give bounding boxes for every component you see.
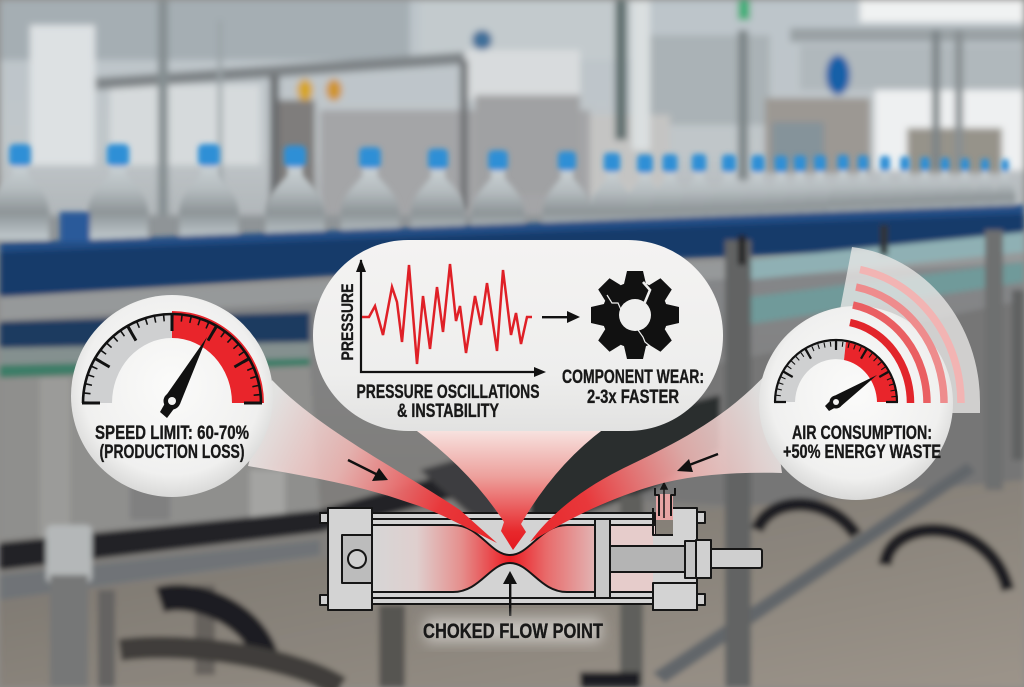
port arrow <box>661 483 667 518</box>
barrel body <box>372 513 655 604</box>
lower body <box>0 245 1024 687</box>
conveyor band <box>0 205 1024 297</box>
label: production loss: (PRODUCTION LOSS) <box>100 442 244 463</box>
gauge ticks <box>82 313 262 403</box>
needle <box>160 337 207 418</box>
pneumatic cylinder diagram <box>320 488 762 610</box>
label: energy waste: +50% ENERGY WASTE <box>783 442 941 463</box>
gauge bands <box>82 313 172 403</box>
gauge ticks <box>774 340 898 402</box>
panel: air consumption gauge <box>759 247 980 500</box>
glow: left connector <box>248 380 497 543</box>
right end cap <box>653 508 697 583</box>
pressure chart <box>356 259 546 377</box>
label: air consumption: AIR CONSUMPTION: <box>792 423 932 444</box>
label halo <box>425 618 601 642</box>
panel: speed limit gauge <box>71 295 273 497</box>
right chamber <box>610 525 655 592</box>
bottles row <box>0 144 1015 240</box>
label: component wear: COMPONENT WEAR: <box>562 367 704 388</box>
label: faster: 2-3x FASTER <box>587 387 679 408</box>
piston <box>595 519 610 598</box>
air port <box>656 494 673 520</box>
label: instability: & INSTABILITY <box>397 401 499 422</box>
arrow: choked point <box>503 571 517 616</box>
panel: pressure and wear <box>313 240 723 431</box>
label: pressure: PRESSURE <box>338 284 357 360</box>
dark rail <box>0 430 600 570</box>
icon: cracked gear <box>591 271 679 359</box>
energy waves <box>850 270 961 403</box>
arrow: to gear <box>542 311 580 323</box>
legs <box>46 525 92 583</box>
glow: centre connector <box>413 428 605 550</box>
gland nut <box>685 541 696 578</box>
glow: right connector <box>530 372 782 542</box>
left end cap <box>328 508 372 610</box>
piston rod <box>610 546 698 572</box>
choked bore <box>372 525 595 592</box>
bolts <box>320 512 705 605</box>
label: choked flow point: CHOKED FLOW POINT <box>423 620 603 643</box>
arrow: flow left <box>348 460 388 481</box>
gauge bands <box>774 340 846 402</box>
radiating wedge <box>840 247 980 413</box>
dark curved feet <box>757 504 856 535</box>
needle <box>825 375 877 411</box>
label: oscillations: PRESSURE OSCILLATIONS <box>356 382 540 403</box>
floor <box>0 480 1024 687</box>
arrow: flow right <box>677 454 718 472</box>
label: speed limit: SPEED LIMIT: 60-70% <box>95 423 249 444</box>
